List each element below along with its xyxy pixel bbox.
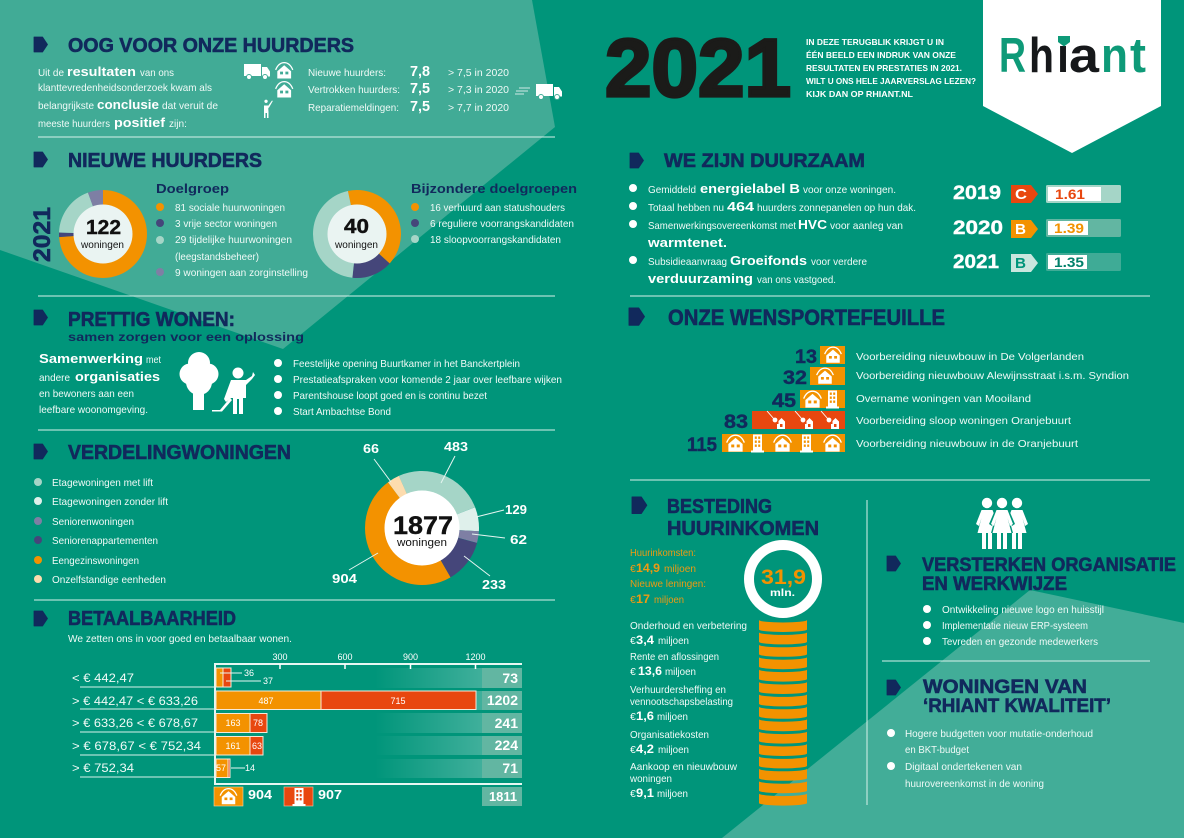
list: duurzaamheid: voor verdere	[811, 256, 867, 268]
donut chart: 1877 woningen	[332, 440, 527, 594]
energy label 2021: B	[1015, 255, 1026, 272]
legend: bijzondere doelgroepen: 18 sloopvoorrangskandidaten	[430, 234, 561, 246]
row: 32 Alewijnsstraat: Voorbereiding nieuwbouw Alewijnsstraat i.s.m. Syndion	[856, 370, 1129, 382]
expense list: 13,6	[638, 666, 662, 678]
bar chart: huurklassen: 73	[502, 670, 518, 686]
bar chart: huurklassen: 161	[225, 741, 241, 751]
donut chart: 1877 woningen: woningen	[396, 537, 447, 549]
donut chart: bijzondere doelgroepen	[305, 182, 409, 286]
income figures: €	[630, 563, 636, 575]
donut chart: doelgroep	[56, 187, 150, 281]
income figures: miljoen	[664, 563, 696, 575]
expense list: Organisatiekosten	[630, 729, 709, 741]
list: organisatie: Implementatie nieuw ERP-systeem	[942, 620, 1088, 632]
list: kwaliteit: huurovereenkomst in de woning	[905, 778, 1044, 790]
logo: Rhiant	[983, 0, 1161, 153]
heading: nieuwe huurders: NIEUWE HUURDERS	[68, 150, 262, 172]
energy label 2020: 1.39	[1054, 221, 1084, 236]
row: 45 Mooiland: Overname woningen van Mooiland	[856, 393, 1031, 405]
heading: betaalbaarheid: BETAALBAARHEID	[68, 608, 236, 630]
heading: onze wensportefeuille: ONZE WENSPORTEFEUILLE	[668, 305, 945, 330]
bar chart: huurklassen: 224	[495, 737, 518, 753]
bar chart: huurklassen: 241	[495, 715, 518, 731]
list: duurzaamheid: voor onze woningen.	[803, 184, 896, 196]
list: duurzaamheid: van ons vastgoed.	[757, 274, 836, 286]
heading: besteding huurinkomen: BESTEDING	[667, 496, 772, 518]
subtitle: We zetten ons in voor goed en betaalbaar wonen.	[68, 633, 292, 645]
legend: bijzondere doelgroepen: Bijzondere doelgroepen	[411, 181, 577, 196]
list: duurzaamheid: voor aanleg van	[830, 220, 903, 232]
intro text: ÉÉN BEELD EEN INDRUK VAN ONZE	[806, 50, 956, 60]
row labels: huurprijzen: > € 442,47 < € 633,26	[72, 694, 198, 708]
satisfaction scores: > 7,7 in 2020	[448, 102, 509, 114]
energy label 2019	[953, 183, 1121, 204]
legend: doelgroep: 9 woningen aan zorginstelling	[175, 267, 308, 279]
heading: besteding huurinkomen: HUURINKOMEN	[667, 518, 819, 540]
intro text: van ons	[140, 67, 174, 79]
energy label 2019: C	[1015, 186, 1027, 203]
list: duurzaamheid: Groeifonds	[730, 253, 807, 268]
panel: prettig wonen	[34, 309, 562, 418]
row: 115 Oranjebuurt: 115	[687, 435, 717, 456]
list: organisatie	[923, 604, 1104, 648]
text: samenwerking: en bewoners aan een	[39, 388, 134, 400]
intro text: zijn:	[169, 118, 187, 130]
legend: woningtypen: Etagewoningen met lift	[52, 477, 153, 489]
row: 32 Alewijnsstraat: 32	[783, 368, 807, 389]
panel: woningen van rhiant kwaliteit	[887, 677, 1111, 790]
text: samenwerking: Samenwerking	[39, 351, 143, 366]
expense list: Verhuurdersheffing en	[630, 684, 726, 696]
donut chart: 1877 woningen: 233	[482, 578, 506, 592]
intro text: KIJK DAN OP RHIANT.NL	[806, 89, 913, 99]
row: 83 sloop	[724, 411, 1071, 433]
legend: bijzondere doelgroepen: 16 verhuurd aan statushouders	[430, 202, 565, 214]
satisfaction scores: Reparatiemeldingen:	[308, 102, 399, 114]
row labels: huurprijzen	[72, 671, 215, 777]
income figures: miljoen	[654, 594, 684, 606]
list: activiteiten: Prestatieafspraken voor komende 2 jaar over leefbare wijken	[293, 374, 562, 386]
chart totals: 1811	[489, 789, 517, 804]
row labels: huurprijzen: > € 633,26 < € 678,67	[72, 716, 198, 730]
logo: Rhiant: a	[1069, 29, 1100, 83]
year label: 2021	[29, 207, 56, 262]
heading: woningen van rhiant kwaliteit: ‘RHIANT KWALITEIT’	[923, 696, 1111, 717]
heading: versterken organisatie: VERSTERKEN ORGANISATIE	[922, 555, 1176, 576]
panel: versterken organisatie	[887, 498, 1176, 648]
satisfaction scores	[308, 63, 509, 115]
logo: Rhiant: h	[1029, 29, 1054, 83]
intro text	[38, 64, 218, 130]
icon: tree and person vacuuming	[180, 352, 255, 414]
heading: woningen van rhiant kwaliteit	[923, 677, 1111, 717]
income figures: €	[630, 594, 636, 606]
list: duurzaamheid: energielabel B	[700, 181, 800, 196]
heading: prettig wonen: PRETTIG WONEN:	[68, 309, 235, 331]
intro text: dat veruit de	[162, 100, 218, 112]
bar chart: huurklassen: 63	[252, 741, 262, 751]
energy label 2021	[953, 252, 1121, 273]
text: samenwerking: andere	[39, 372, 70, 384]
bar chart: huurklassen: 1202	[487, 692, 518, 708]
income figures: Huurinkomsten:	[630, 547, 696, 559]
donut chart: 1877 woningen: 1877	[393, 512, 453, 540]
bar chart: huurklassen: 78	[253, 718, 263, 728]
heading: versterken organisatie: EN WERKWIJZE	[922, 574, 1067, 595]
coin stack	[759, 620, 807, 806]
income figures: 14,9	[636, 561, 660, 575]
intro text: Uit de	[38, 67, 64, 79]
income figures: 17	[636, 592, 650, 606]
list: kwaliteit: Hogere budgetten voor mutatie-onderhoud	[905, 728, 1093, 740]
satisfaction scores: Nieuwe huurders:	[308, 67, 386, 79]
panel: nieuwe huurders	[29, 150, 577, 286]
expense list: miljoen	[658, 635, 689, 647]
row: 13 Volgerlanden: 13	[795, 347, 817, 368]
logo: Rhiant: n	[1101, 29, 1128, 83]
satisfaction scores: > 7,5 in 2020	[448, 67, 509, 79]
intro text: resultaten	[67, 64, 136, 79]
legend: doelgroep: (leegstandsbeheer)	[175, 251, 259, 263]
list: duurzaamheid: Gemiddeld	[648, 184, 696, 196]
legend: doelgroep: Doelgroep	[156, 181, 229, 196]
expense list: €	[630, 788, 636, 800]
bar chart: huurklassen: 37	[263, 676, 273, 686]
legend: woningtypen	[34, 477, 168, 586]
intro text: WILT U ONS HELE JAARVERSLAG LEZEN?	[806, 76, 976, 86]
panel: we zijn duurzaam	[629, 151, 1121, 286]
text: samenwerking	[39, 351, 161, 416]
row: 115 Oranjebuurt	[687, 434, 1078, 456]
row: 13 Volgerlanden: Voorbereiding nieuwbouw in De Volgerlanden	[856, 351, 1084, 363]
donut chart: doelgroep: woningen	[80, 240, 124, 251]
expense list: 3,4	[636, 635, 655, 647]
bar chart: huurklassen: 71	[502, 760, 518, 776]
legend: woningtypen: Seniorenwoningen	[52, 516, 134, 528]
donut chart: 1877 woningen: 129	[505, 503, 527, 517]
list: duurzaamheid: Samenwerkingsovereenkomst met	[648, 220, 796, 232]
satisfaction scores: Vertrokken huurders:	[308, 84, 400, 96]
satisfaction scores: 7,5	[410, 98, 430, 115]
donut chart: 1877 woningen: 62	[510, 533, 527, 547]
list: duurzaamheid: warmtenet.	[647, 235, 727, 250]
income figures	[630, 547, 706, 606]
list: activiteiten	[274, 358, 562, 418]
donut chart: bijzondere doelgroepen: woningen	[334, 240, 378, 251]
row: 45 Mooiland	[772, 390, 1031, 412]
subheading: samen zorgen voor een oplossing	[68, 330, 304, 344]
legend: doelgroep: 81 sociale huurwoningen	[175, 202, 285, 214]
logo: Rhiant: t	[1130, 29, 1146, 83]
icons: truck and houses	[244, 63, 293, 118]
energy label 2020	[953, 218, 1121, 239]
ring: total 31,9 mln	[749, 545, 817, 613]
bar chart: huurklassen: 300	[272, 652, 288, 662]
row: 83 sloop: Voorbereiding sloop woningen Oranjebuurt	[856, 415, 1071, 427]
intro text: positief	[114, 115, 166, 130]
income figures: Nieuwe leningen:	[630, 578, 706, 590]
row: 115 Oranjebuurt: Voorbereiding nieuwbouw in de Oranjebuurt	[856, 438, 1078, 450]
panel: verdeling woningen	[34, 440, 527, 594]
list: duurzaamheid: verduurzaming	[648, 271, 753, 286]
legend: woningtypen: Onzelfstandige eenheden	[52, 574, 166, 586]
expense list: 1,6	[636, 711, 654, 723]
list: organisatie: Ontwikkeling nieuwe logo en huisstijl	[942, 604, 1104, 616]
energy label 2020: B	[1015, 221, 1026, 238]
intro text: RESULTATEN EN PRESTATIES IN 2021.	[806, 63, 962, 73]
row: 13 Volgerlanden	[795, 346, 1084, 368]
heading: woningen van rhiant kwaliteit: WONINGEN VAN	[923, 677, 1087, 698]
bar chart: huurklassen: 1200	[465, 652, 486, 662]
text: samenwerking: organisaties	[75, 369, 160, 384]
heading: we zijn duurzaam: WE ZIJN DUURZAAM	[664, 151, 865, 172]
energy label 2019: 2019	[953, 183, 1001, 204]
expense list: miljoen	[665, 666, 696, 678]
expense list: vennootschapsbelasting	[630, 696, 733, 708]
list: kwaliteit	[887, 728, 1093, 790]
ring: total 31,9 mln: mln.	[770, 588, 795, 599]
bar chart: huurklassen: 900	[403, 652, 418, 662]
donut chart: 1877 woningen: 483	[444, 440, 468, 454]
legend: bijzondere doelgroepen	[411, 181, 577, 246]
row: 45 Mooiland: 45	[772, 391, 796, 412]
text: samenwerking: met	[146, 354, 161, 366]
expense list: €	[630, 635, 636, 647]
chart totals: 904	[248, 787, 273, 802]
bar chart: huurklassen: 57	[216, 763, 226, 773]
expense list: 9,1	[636, 788, 655, 800]
intro text: klanttevredenheidsonderzoek kwam als	[38, 82, 212, 94]
ring: total 31,9 mln: 31,9	[761, 566, 806, 589]
list: activiteiten: Feestelijke opening Buurtkamer in het Banckertplein	[293, 358, 520, 370]
donut chart: 1877 woningen: 66	[363, 442, 379, 456]
row: 32 Alewijnsstraat	[783, 367, 1129, 389]
heading: oog voor onze huurders: OOG VOOR ONZE HUURDERS	[68, 35, 354, 57]
list: organisatie: Tevreden en gezonde medewerkers	[942, 636, 1098, 648]
energy label 2021: 1.35	[1054, 255, 1085, 270]
energy label 2019: 1.61	[1055, 187, 1086, 202]
list: duurzaamheid: 464	[727, 199, 755, 214]
expense list	[629, 620, 747, 800]
panel: onze wensportefeuille	[629, 305, 1129, 456]
donut chart: doelgroep: 122	[86, 217, 121, 239]
list: kwaliteit: Digitaal ondertekenen van	[905, 761, 1022, 773]
satisfaction scores: 7,8	[410, 63, 430, 80]
satisfaction scores: 7,5	[410, 80, 430, 97]
expense list: Rente en aflossingen	[630, 651, 719, 663]
donut chart: bijzondere doelgroepen: 40	[344, 216, 369, 238]
expense list: €	[630, 666, 636, 678]
legend: woningtypen: Eengezinswoningen	[52, 555, 139, 567]
list: duurzaamheid: Totaal hebben nu	[648, 202, 724, 214]
intro text: belangrijkste	[38, 100, 94, 112]
legend: doelgroep	[156, 181, 308, 279]
legend: woningtypen: Seniorenappartementen	[52, 535, 158, 547]
expense list: miljoen	[657, 788, 688, 800]
row labels: huurprijzen: > € 678,67 < € 752,34	[72, 739, 201, 753]
expense list: Aankoop en nieuwbouw	[630, 761, 737, 773]
expense list: miljoen	[657, 711, 688, 723]
row labels: huurprijzen: > € 752,34	[72, 761, 134, 775]
energy label 2021: 2021	[953, 252, 999, 273]
chart totals: 907	[318, 787, 342, 802]
chart totals	[214, 787, 522, 806]
intro text: conclusie	[97, 97, 159, 112]
legend: doelgroep: 29 tijdelijke huurwoningen	[175, 234, 292, 246]
intro text: meeste huurders	[38, 118, 110, 130]
bar chart: huurklassen	[215, 652, 522, 785]
heading: verdelingwoningen: VERDELINGWONINGEN	[68, 442, 291, 464]
bar chart: huurklassen: 163	[225, 718, 241, 728]
row: 83 sloop: 83	[724, 412, 748, 433]
icon: three people	[976, 498, 1028, 549]
bar chart: huurklassen: 14	[245, 763, 255, 773]
heading: versterken organisatie	[922, 555, 1176, 595]
intro text	[806, 37, 976, 99]
legend: woningtypen: Etagewoningen zonder lift	[52, 496, 168, 508]
text: samenwerking: leefbare woonomgeving.	[39, 404, 148, 416]
expense list: woningen	[629, 773, 672, 785]
list: activiteiten: Start Ambachtse Bond	[293, 406, 391, 418]
panel: oog voor onze huurders	[34, 35, 562, 130]
row labels: huurprijzen: < € 442,47	[72, 671, 134, 685]
list: activiteiten: Parentshouse loopt goed en is continu bezet	[293, 390, 487, 402]
list: duurzaamheid: huurders zonnepanelen op hun dak.	[757, 202, 916, 214]
expense list: €	[630, 711, 636, 723]
heading: besteding huurinkomen	[667, 496, 819, 540]
panel: betaalbaarheid	[34, 608, 522, 806]
logo: Rhiant: R	[999, 29, 1026, 83]
panel: besteding huurinkomen	[629, 496, 819, 806]
bar chart: huurklassen: 715	[390, 696, 406, 706]
icon: moving truck	[515, 84, 562, 100]
expense list: €	[630, 744, 636, 756]
big year: 2021	[605, 23, 791, 114]
expense list: Onderhoud en verbetering	[630, 620, 747, 632]
list: duurzaamheid: Subsidieaanvraag	[648, 256, 727, 268]
logo: Rhiant: ı	[1057, 29, 1069, 83]
legend: doelgroep: 3 vrije sector woningen	[175, 218, 277, 230]
intro text: IN DEZE TERUGBLIK KRIJGT U IN	[806, 37, 944, 47]
energy label 2020: 2020	[953, 218, 1003, 239]
legend: bijzondere doelgroepen: 6 reguliere voorrangskandidaten	[430, 218, 574, 230]
list: kwaliteit: en BKT-budget	[905, 744, 969, 756]
expense list: miljoen	[658, 744, 689, 756]
expense list: 4,2	[636, 744, 654, 756]
list: duurzaamheid: HVC	[798, 217, 828, 232]
list: duurzaamheid	[629, 181, 916, 286]
bar chart: huurklassen: 36	[244, 668, 254, 678]
donut chart: 1877 woningen: 904	[332, 572, 357, 586]
satisfaction scores: > 7,3 in 2020	[448, 84, 509, 96]
bar chart: huurklassen: 600	[337, 652, 353, 662]
bar chart: huurklassen: 487	[258, 696, 274, 706]
